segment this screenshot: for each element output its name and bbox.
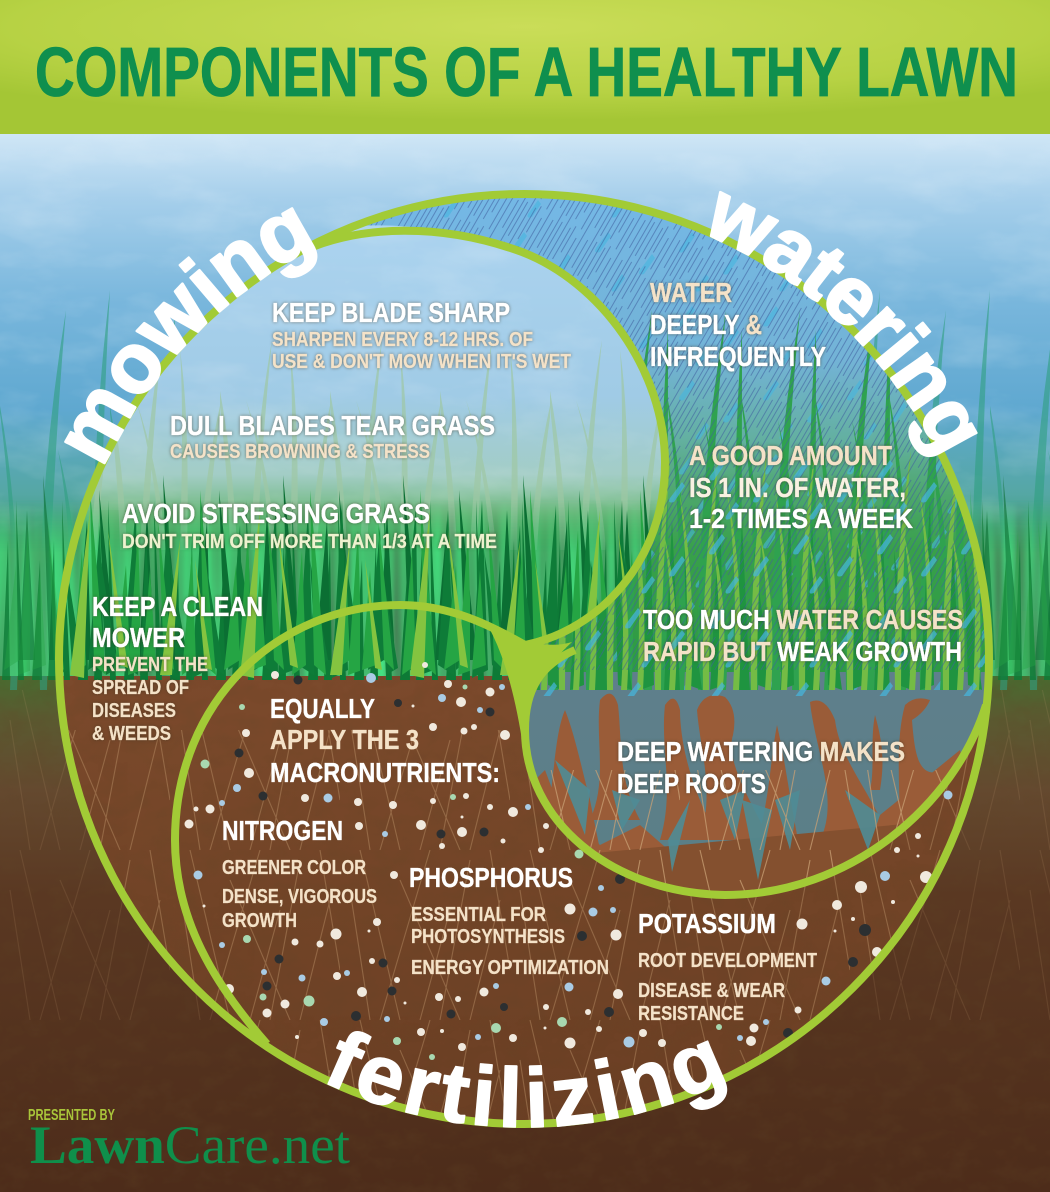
panel: watering tips bbox=[617, 277, 963, 799]
hatching rain lines bbox=[370, 198, 985, 670]
nitrogen bbox=[222, 815, 377, 932]
macronutrients heading: MACRONUTRIENTS: bbox=[270, 757, 500, 788]
potassium: RESISTANCE bbox=[638, 1003, 744, 1025]
tip: water deeply: DEEPLY & bbox=[650, 309, 762, 340]
roots bbox=[538, 694, 960, 853]
tip: dull blades: CAUSES BROWNING & STRESS bbox=[170, 441, 430, 463]
water drops bbox=[444, 200, 984, 690]
tip: water deeply bbox=[650, 277, 826, 372]
nitrogen: DENSE, VIGOROUS bbox=[222, 886, 377, 908]
teal spikes between roots bbox=[555, 760, 880, 880]
nitrogen: NITROGEN bbox=[222, 815, 343, 846]
panel: watering background with rain, grass and roots bbox=[367, 198, 985, 891]
tip: too much water: TOO MUCH WATER CAUSES bbox=[643, 604, 963, 635]
tip: clean mower: KEEP A CLEAN bbox=[92, 591, 263, 622]
tip: keep blade sharp: USE & DON'T MOW WHEN IT'S WET bbox=[272, 351, 571, 373]
phosphorus: ESSENTIAL FOR bbox=[411, 904, 546, 926]
curved heading: watering: watering bbox=[710, 190, 978, 458]
tip: clean mower: SPREAD OF bbox=[92, 677, 189, 699]
macronutrients heading: EQUALLY bbox=[270, 693, 375, 724]
watering grass blades bbox=[536, 310, 982, 690]
swirl rings: outer circle and three inner curves bbox=[59, 194, 989, 1124]
tip: keep blade sharp bbox=[272, 297, 571, 373]
tip: dull blades: DULL BLADES TEAR GRASS bbox=[170, 410, 495, 441]
gray wet soil bbox=[529, 672, 985, 846]
tip: deep roots: DEEP ROOTS bbox=[617, 768, 766, 799]
tip: good amount: 1-2 TIMES A WEEK bbox=[689, 503, 913, 534]
tip: keep blade sharp: KEEP BLADE SHARP bbox=[272, 297, 510, 328]
tip: avoid stressing grass: DON'T TRIM OFF MORE THAN 1/3 AT A TIME bbox=[122, 531, 497, 553]
panel: circle interior base (mowing) bbox=[63, 226, 978, 1120]
tip: too much water: RAPID BUT WEAK GROWTH bbox=[643, 636, 962, 667]
green particles bbox=[200, 684, 722, 1060]
outside grass left and right bbox=[0, 270, 1050, 690]
phosphorus: PHOSPHORUS bbox=[409, 862, 573, 893]
nitrogen: GROWTH bbox=[222, 910, 297, 932]
black particles bbox=[234, 676, 871, 1038]
tip: dull blades bbox=[170, 410, 495, 463]
curved heading: mowing: mowing bbox=[64, 207, 318, 464]
tip: clean mower: DISEASES bbox=[92, 700, 176, 722]
fine roots bbox=[550, 770, 942, 890]
tip: avoid stressing grass: AVOID STRESSING GRASS bbox=[122, 498, 430, 529]
phosphorus bbox=[409, 862, 609, 979]
panel: fertilizing tips bbox=[222, 693, 817, 1025]
tip: avoid stressing grass bbox=[122, 498, 497, 553]
macronutrients heading: APPLY THE 3 bbox=[270, 724, 419, 755]
tip: clean mower: MOWER bbox=[92, 622, 185, 653]
tip: water deeply: INFREQUENTLY bbox=[650, 341, 826, 372]
nitrogen: GREENER COLOR bbox=[222, 857, 366, 879]
tip: deep roots: DEEP WATERING MAKES bbox=[617, 736, 905, 767]
blue particles bbox=[194, 673, 952, 1048]
top title band bbox=[0, 0, 1050, 134]
tip: good amount: IS 1 IN. OF WATER, bbox=[689, 472, 906, 503]
panel: mowing tips bbox=[92, 297, 571, 745]
potassium: DISEASE & WEAR bbox=[638, 980, 785, 1002]
potassium bbox=[638, 908, 817, 1025]
phosphorus: ENERGY OPTIMIZATION bbox=[411, 957, 609, 979]
outside root fibres bbox=[0, 690, 1050, 1020]
tip: clean mower: & WEEDS bbox=[92, 723, 171, 745]
tip: deep roots bbox=[617, 736, 905, 799]
white particles bbox=[184, 662, 932, 1051]
tip: water deeply: WATER bbox=[650, 277, 732, 308]
credit: presented by LawnCare.net: PRESENTED BY bbox=[28, 1107, 115, 1124]
potassium: POTASSIUM bbox=[638, 908, 776, 939]
tip: keep blade sharp: SHARPEN EVERY 8-12 HRS. OF bbox=[272, 329, 533, 351]
macronutrients heading bbox=[270, 693, 500, 788]
soil nutrient particles bbox=[184, 662, 952, 1060]
curved heading: fertilizing: fertilizing bbox=[327, 1031, 728, 1128]
tip: too much water bbox=[643, 604, 963, 667]
tip: good amount: A GOOD AMOUNT bbox=[689, 440, 892, 471]
phosphorus: PHOTOSYNTHESIS bbox=[411, 926, 565, 948]
tip: good amount bbox=[689, 440, 913, 534]
credit: presented by LawnCare.net: LawnCare.net bbox=[30, 1115, 350, 1175]
tip: clean mower: PREVENT THE bbox=[92, 654, 208, 676]
tip: clean mower bbox=[92, 591, 263, 745]
potassium: ROOT DEVELOPMENT bbox=[638, 950, 817, 972]
